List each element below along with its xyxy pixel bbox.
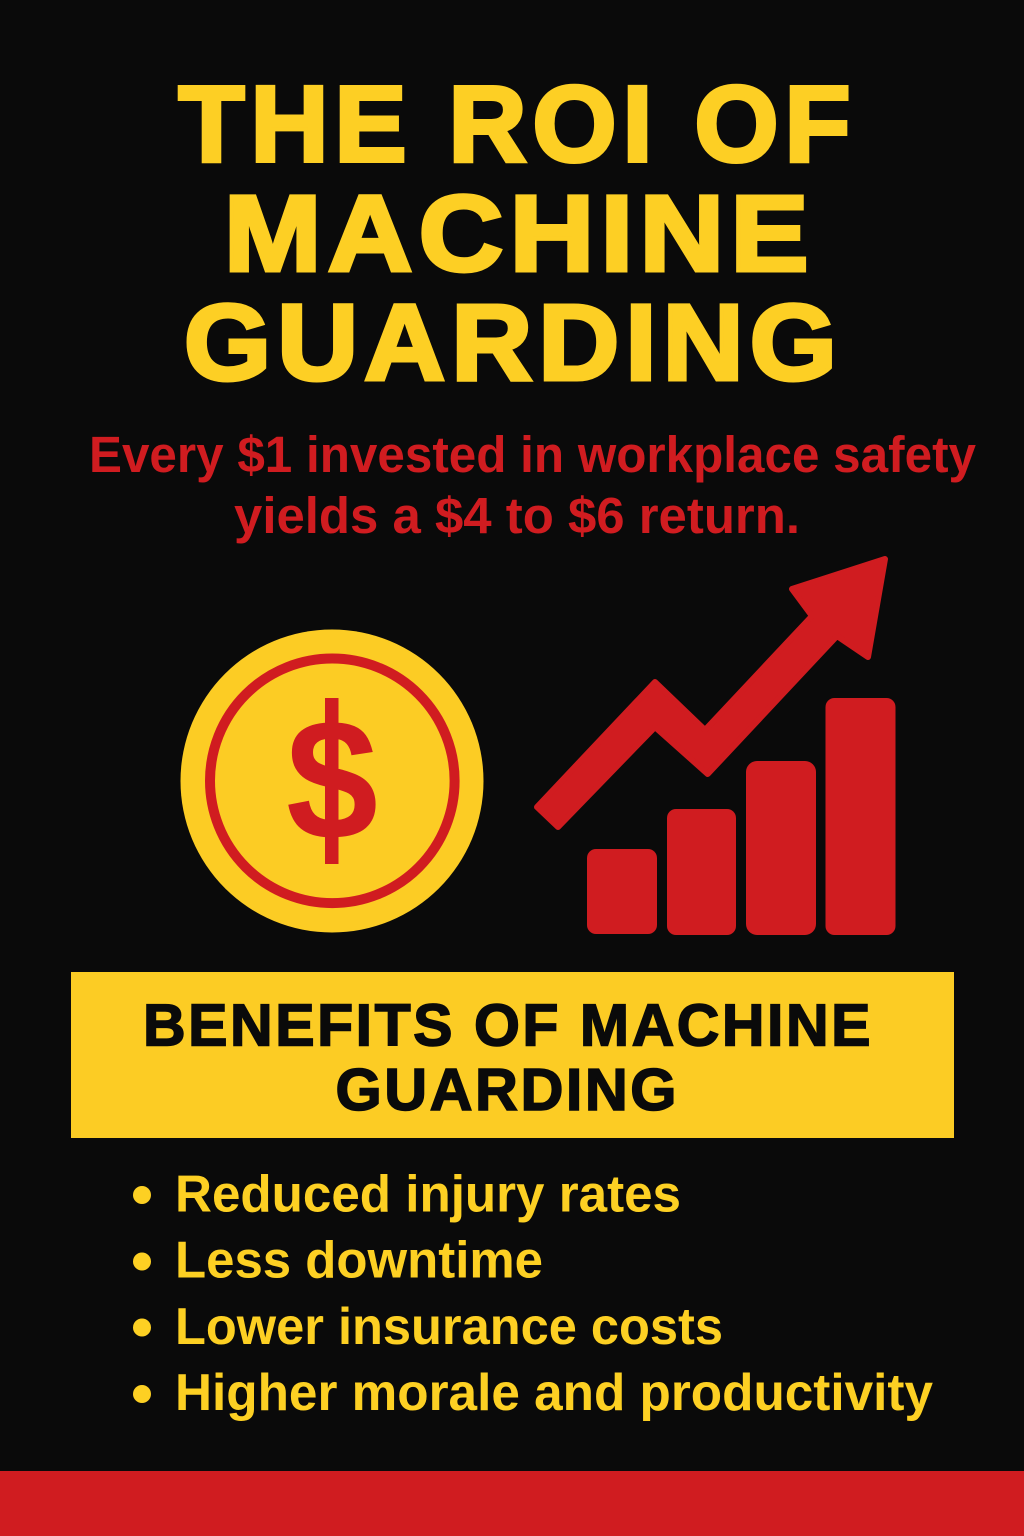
subtitle: yields a $4 to $6 return. (234, 487, 800, 544)
icon: dollar coin (180, 630, 484, 932)
benefits banner: BENEFITS OF MACHINE (143, 992, 873, 1058)
icon: growth chart with arrow (537, 559, 896, 935)
item 1: Reduced injury rates (175, 1166, 681, 1224)
title: GUARDING (184, 282, 843, 402)
bar 2 (667, 809, 736, 935)
title: THE ROI OF (178, 63, 856, 184)
benefits banner (71, 972, 954, 1138)
icon: dollar coin: $ (286, 683, 378, 876)
subtitle (89, 426, 977, 544)
bullet 4 (133, 1385, 151, 1403)
bar 1 (587, 849, 657, 934)
footer bar (0, 1471, 1024, 1536)
bullet 3 (133, 1318, 151, 1336)
subtitle: Every $1 invested in workplace safety (89, 426, 977, 483)
arrow (537, 559, 885, 827)
item 2: Less downtime (175, 1232, 543, 1290)
title: MACHINE (224, 172, 815, 294)
item 3: Lower insurance costs (175, 1298, 723, 1356)
bullet 2 (133, 1252, 151, 1270)
title (178, 63, 856, 402)
benefits banner: GUARDING (336, 1057, 679, 1123)
bar 4 (826, 698, 896, 935)
bar 3 (746, 761, 816, 935)
item 4: Higher morale and productivity (175, 1364, 933, 1422)
bullet 1 (133, 1186, 151, 1204)
benefits list (133, 1166, 933, 1422)
